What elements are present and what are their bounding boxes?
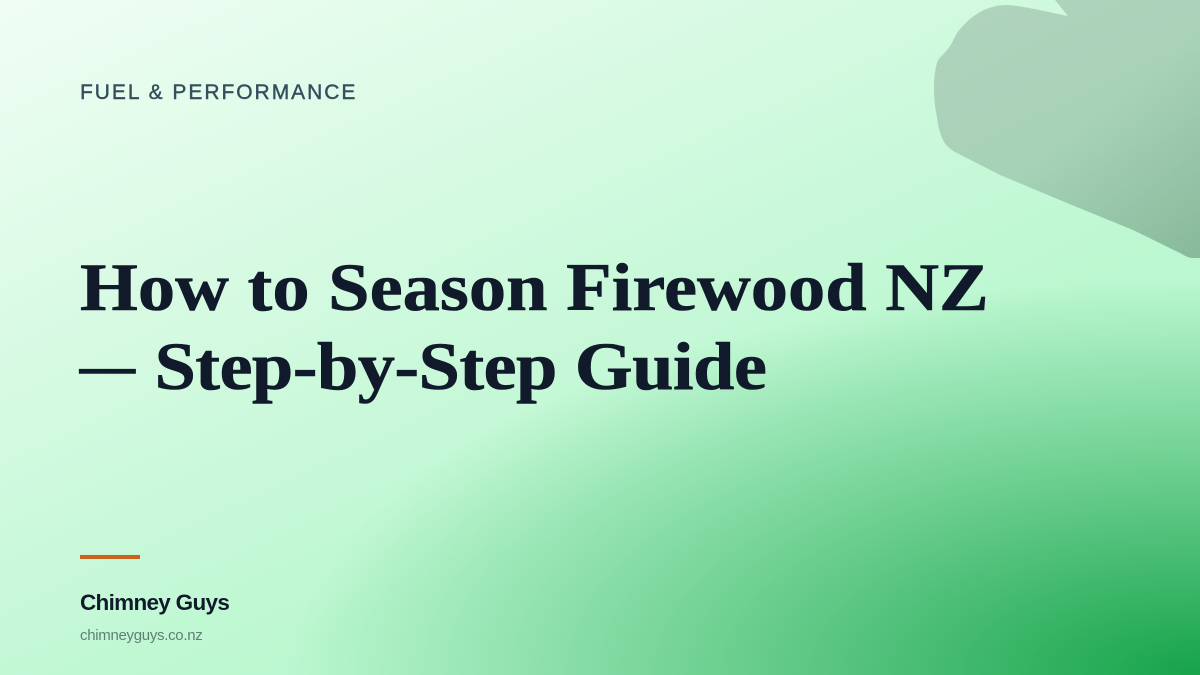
accent rule: [80, 555, 140, 559]
brand name: Chimney Guys: [80, 590, 229, 615]
title: —: [80, 338, 134, 394]
website: chimneyguys.co.nz: [80, 627, 202, 644]
title: [78, 249, 989, 404]
title: Step-by-Step Guide: [154, 328, 766, 404]
eyebrow label: FUEL & PERFORMANCE: [80, 81, 357, 104]
title: How to Season Firewood NZ: [80, 249, 989, 325]
